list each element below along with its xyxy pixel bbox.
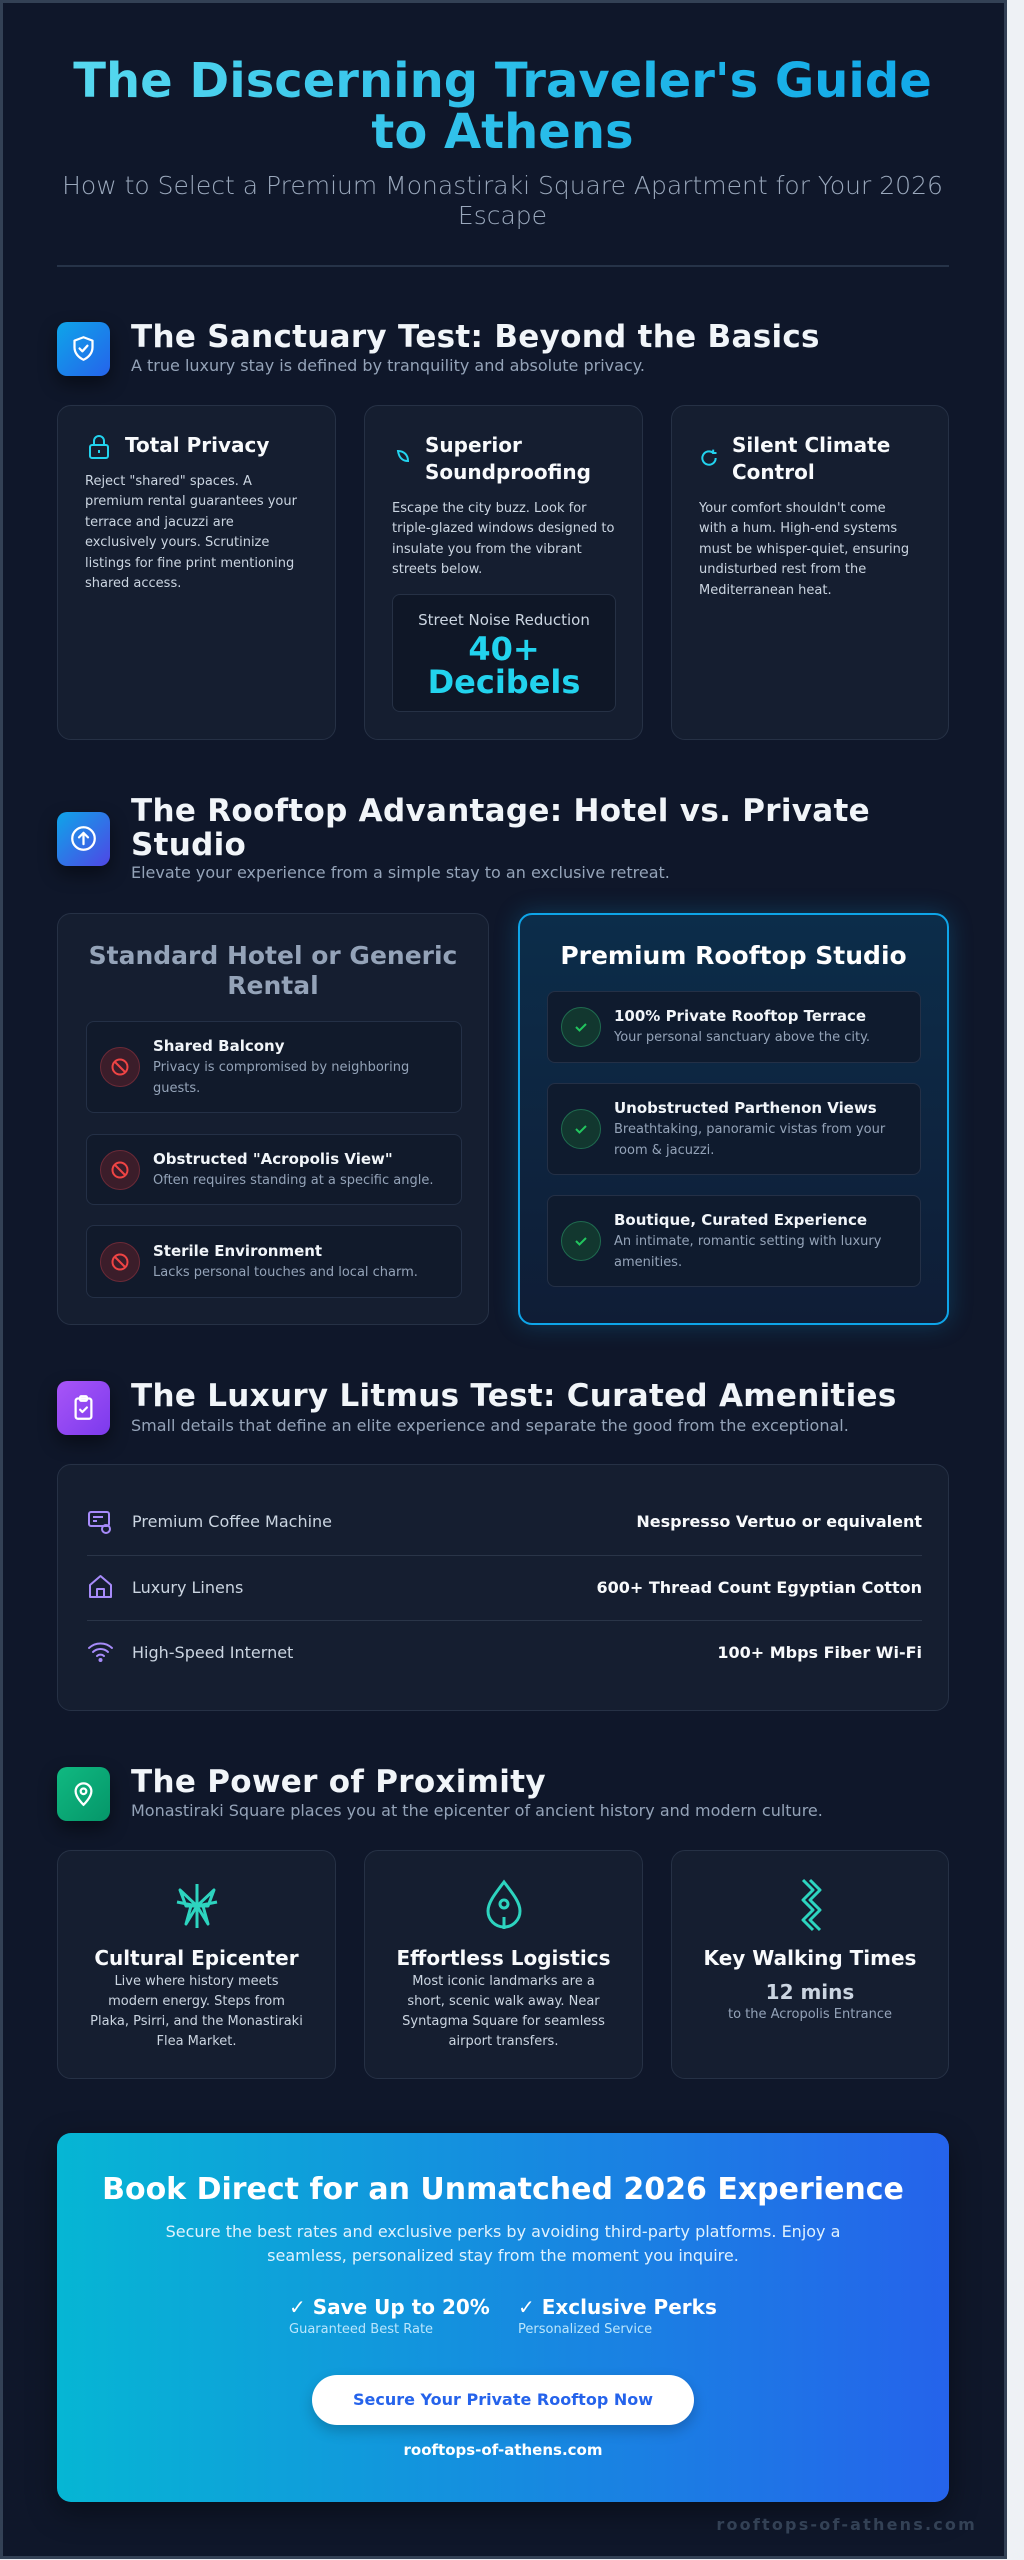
panel: standard hotel	[57, 913, 489, 1325]
heading	[89, 941, 457, 1000]
item: sterile: Sterile Environment	[153, 1242, 322, 1260]
perk: save	[289, 2295, 490, 2337]
item: sterile: Lacks personal touches and local charm.	[153, 1265, 418, 1280]
perk: save: Guaranteed Best Rate	[289, 2322, 433, 2337]
callout: noise reduction: Decibels	[428, 663, 580, 701]
callout: book direct	[57, 2133, 949, 2502]
text: modern energy. Steps from	[108, 1994, 285, 2009]
icon: clipboard	[57, 1381, 110, 1435]
panel: silent climate	[671, 405, 949, 740]
row: linens: 600+ Thread Count Egyptian Cotton	[596, 1578, 922, 1597]
heading: The Rooftop Advantage: Hotel vs. Private	[131, 793, 870, 829]
heading: Premium Rooftop Studio	[560, 941, 907, 970]
callout: noise reduction: 40+	[468, 630, 540, 668]
item: private terrace: Your personal sanctuary above the city.	[614, 1030, 870, 1045]
subtitle: How to Select a Premium Monastiraki Square Apartment for Your 2026 Escape	[62, 171, 943, 230]
icon: leaf	[396, 450, 409, 462]
text: Most iconic landmarks are a	[412, 1974, 595, 1989]
item: obstructed view: Obstructed "Acropolis View"	[153, 1150, 393, 1168]
url: rooftops-of-athens.com	[404, 2441, 602, 2459]
heading: Standard Hotel or Generic	[89, 941, 457, 970]
heading: The Luxury Litmus Test: Curated Amenities	[131, 1378, 897, 1414]
heading: Effortless Logistics	[397, 1946, 610, 1970]
section 1 header	[56, 319, 820, 386]
item: sterile	[86, 1225, 462, 1298]
row: coffee: Premium Coffee Machine	[132, 1512, 332, 1531]
heading: Control	[732, 460, 815, 484]
title	[0, 56, 1005, 158]
text	[402, 1974, 605, 2049]
text: Secure the best rates and exclusive perks by avoiding third-party platforms. Enjoy a seamless, personalized stay from the moment you inquire.	[166, 2222, 840, 2265]
section 2 header	[56, 793, 870, 882]
row: internet	[88, 1642, 922, 1662]
heading: Key Walking Times	[704, 1946, 916, 1970]
perk: exclusive: ✓ Exclusive Perks	[518, 2295, 717, 2319]
text: Escape the city buzz. Look for triple-glazed windows designed to insulate you from the vibrant streets below.	[392, 501, 614, 577]
footer watermark: rooftops-of-athens.com	[716, 2515, 977, 2534]
item: shared balcony: Shared Balcony	[153, 1037, 284, 1055]
panel: amenities table	[57, 1464, 949, 1711]
heading: Book Direct for an Unmatched 2026 Experience	[102, 2172, 904, 2207]
icon: refresh	[701, 450, 717, 466]
item: parthenon views	[547, 1083, 921, 1175]
heading: The Power of Proximity	[131, 1764, 546, 1800]
title: The Discerning Traveler's Guide	[73, 53, 932, 109]
text: Live where history meets	[114, 1974, 279, 1989]
item: private terrace: 100% Private Rooftop Terrace	[614, 1007, 866, 1025]
panel: soundproofing	[364, 405, 643, 740]
stat: 12 mins	[766, 1980, 854, 2004]
text: Flea Market.	[156, 2034, 236, 2049]
panel: premium rooftop studio	[518, 913, 949, 1325]
icon: lock	[89, 435, 109, 459]
item: shared balcony: Privacy is compromised by neighboring guests.	[153, 1060, 409, 1096]
item: parthenon views: Unobstructed Parthenon Views	[614, 1099, 877, 1117]
row: coffee: Nespresso Vertuo or equivalent	[636, 1512, 922, 1531]
text: Reject "shared" spaces. A premium rental guarantees your terrace and jacuzzi are exclusively yours. Scrutinize listings for fine print mentioning shared access.	[85, 474, 297, 591]
panel: logistics	[364, 1850, 643, 2079]
item: obstructed view	[86, 1134, 462, 1205]
panel: walking times	[671, 1850, 949, 2079]
item: boutique: Boutique, Curated Experience	[614, 1211, 867, 1229]
panel: cultural epicenter	[57, 1850, 336, 2079]
heading: Studio	[131, 827, 246, 863]
heading: Superior	[425, 433, 522, 457]
heading: Silent Climate	[732, 433, 890, 457]
text	[90, 1974, 303, 2049]
item: parthenon views: Breathtaking, panoramic vistas from your room & jacuzzi.	[614, 1122, 885, 1158]
icon: zigzag	[801, 1879, 822, 1931]
perk: exclusive: Personalized Service	[518, 2322, 652, 2337]
icon: arrow up	[57, 812, 110, 866]
item: obstructed view: Often requires standing at a specific angle.	[153, 1173, 433, 1188]
heading: Total Privacy	[125, 433, 269, 457]
callout: noise reduction	[392, 594, 616, 712]
subheading: Small details that define an elite experience and separate the good from the exceptional.	[131, 1416, 849, 1435]
text: Your comfort shouldn't come with a hum. High-end systems must be whisper-quiet, ensuring undisturbed rest from the Mediterranean heat.	[699, 501, 909, 598]
subheading: A true luxury stay is defined by tranquility and absolute privacy.	[131, 356, 645, 375]
heading: Cultural Epicenter	[94, 1946, 299, 1970]
perk: exclusive	[518, 2295, 717, 2337]
heading	[131, 793, 870, 863]
section 4 header	[56, 1764, 823, 1830]
button	[312, 2375, 694, 2425]
row: linens	[89, 1575, 922, 1598]
heading	[732, 433, 890, 484]
panel: walking times: to the Acropolis Entrance	[728, 2007, 892, 2022]
heading: Rental	[227, 971, 319, 1000]
item: boutique: An intimate, romantic setting with luxury amenities.	[614, 1234, 881, 1270]
text: short, scenic walk away. Near	[407, 1994, 600, 2009]
heading: Soundproofing	[425, 460, 591, 484]
row: internet: High-Speed Internet	[132, 1643, 293, 1662]
icon: pin	[57, 1767, 110, 1821]
item: shared balcony	[86, 1021, 462, 1113]
title: to Athens	[371, 104, 634, 160]
row: internet: 100+ Mbps Fiber Wi-Fi	[717, 1643, 922, 1662]
subheading: Elevate your experience from a simple stay to an exclusive retreat.	[131, 863, 670, 882]
panel: total privacy	[57, 405, 336, 740]
text: Syntagma Square for seamless	[402, 2014, 605, 2029]
heading	[425, 433, 591, 484]
section 3 header	[56, 1378, 897, 1444]
row: linens: Luxury Linens	[132, 1578, 243, 1597]
perk: save: ✓ Save Up to 20%	[289, 2295, 490, 2319]
text: Plaka, Psirri, and the Monastiraki	[90, 2014, 303, 2029]
heading: The Sanctuary Test: Beyond the Basics	[131, 319, 820, 355]
icon: star burst	[176, 1884, 218, 1928]
icon: shield	[57, 322, 110, 376]
item: boutique	[547, 1195, 921, 1287]
icon: drop pin	[486, 1880, 522, 1929]
text: airport transfers.	[449, 2034, 558, 2049]
callout: noise reduction: Street Noise Reduction	[418, 611, 590, 629]
subheading: Monastiraki Square places you at the epicenter of ancient history and modern culture.	[131, 1801, 823, 1820]
button: Secure Your Private Rooftop Now	[353, 2390, 653, 2409]
row: coffee	[88, 1511, 922, 1534]
item: private terrace	[547, 991, 921, 1063]
